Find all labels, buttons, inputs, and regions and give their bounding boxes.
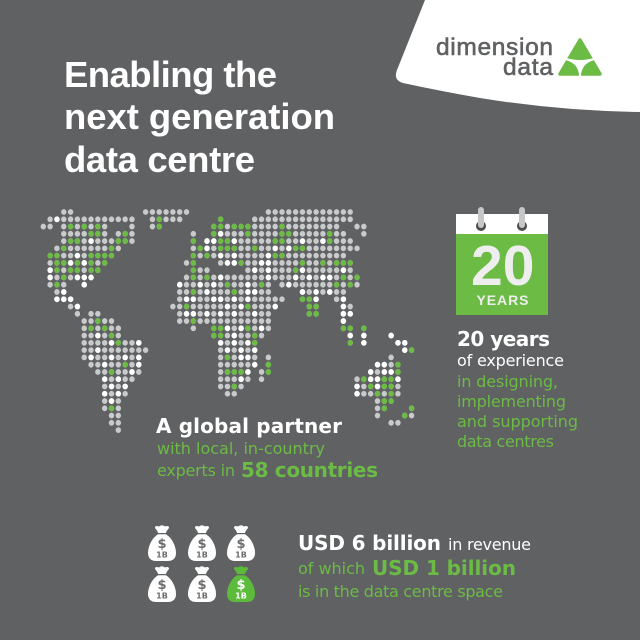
title: data centre xyxy=(64,139,255,180)
bag 6: green xyxy=(227,566,255,602)
bag 2: 1B xyxy=(196,550,208,560)
calendar rings xyxy=(476,207,527,231)
calendar icon xyxy=(456,207,548,315)
text: revenue: in revenue xyxy=(448,535,531,554)
text: global partner: experts in xyxy=(157,461,235,480)
bag 3 xyxy=(227,525,255,561)
text: revenue: USD 1 billion xyxy=(372,556,516,580)
text: experience: implementing xyxy=(457,392,566,411)
logo wordmark: dimension xyxy=(436,34,553,61)
text: revenue: is in the data centre space xyxy=(298,582,503,601)
text: global partner xyxy=(156,414,378,482)
text: revenue: USD 6 billion xyxy=(298,531,441,555)
bag 1: $ xyxy=(157,537,167,552)
bag 4: 1B xyxy=(156,592,168,600)
bag 1: 1B xyxy=(156,550,168,560)
text: experience: 20 years xyxy=(457,327,550,351)
bag 5 xyxy=(188,566,216,602)
bag 6: green: $ xyxy=(236,578,246,593)
text: experience: in designing, xyxy=(457,372,558,391)
text: experience: data centres xyxy=(457,432,554,451)
bag 5: 1B xyxy=(196,592,208,600)
bag 3: $ xyxy=(236,537,246,552)
text: experience: and supporting xyxy=(457,412,578,431)
bag 6: green: 1B xyxy=(235,592,247,600)
title: next generation xyxy=(64,96,335,137)
bag 5: $ xyxy=(197,578,207,593)
bag 4 xyxy=(148,566,176,602)
title: Enabling the xyxy=(64,54,277,95)
dot world map xyxy=(43,212,412,430)
bag 3: 1B xyxy=(235,550,247,560)
text: experience xyxy=(457,327,578,451)
logo wordmark: data xyxy=(503,54,553,81)
bag 4: $ xyxy=(157,578,167,593)
text: global partner: with local, in-country xyxy=(157,439,325,458)
calendar caption: YEARS xyxy=(476,292,528,308)
title xyxy=(64,54,335,180)
bag 1 xyxy=(148,525,176,561)
text: global partner: 58 countries xyxy=(241,458,378,482)
logo triangle icon xyxy=(560,40,600,77)
text: revenue: of which xyxy=(298,559,365,578)
bag 2 xyxy=(188,525,216,561)
text: global partner: A global partner xyxy=(156,414,342,438)
bag 2: $ xyxy=(197,537,207,552)
money bags xyxy=(148,525,255,602)
text: experience: of experience xyxy=(457,351,564,370)
calendar number: 20 xyxy=(471,234,534,298)
text: revenue xyxy=(298,531,531,601)
logo wordmark xyxy=(436,34,553,81)
logo panel xyxy=(396,0,640,112)
